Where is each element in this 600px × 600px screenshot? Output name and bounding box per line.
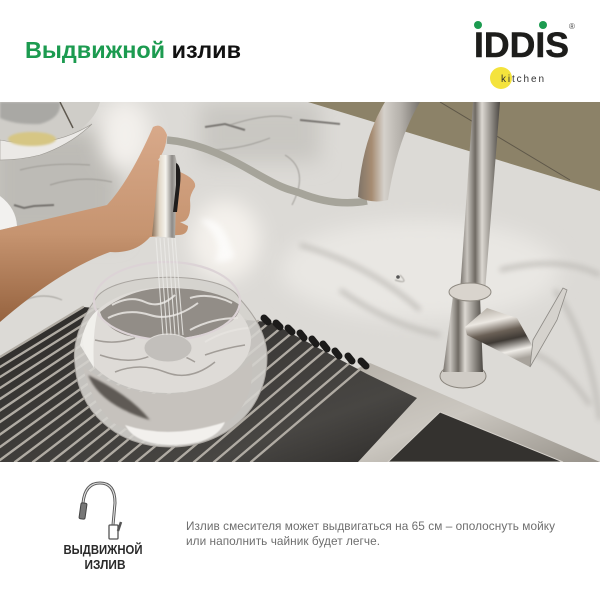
water surface [83,287,251,393]
icon label: ИЗЛИВ [84,558,126,572]
bowl on counter at top left [0,102,100,160]
bowl glass body [74,277,267,447]
logo yellow circle [490,67,512,89]
hose [167,140,367,203]
sink basin left [0,307,417,462]
white object at left edge [0,196,17,230]
water streams [156,238,183,335]
drying rack bars [0,307,365,462]
marble countertop [0,102,600,462]
water ripples [108,294,236,331]
faucet lever [530,288,567,367]
description text [186,519,555,548]
bowl rim [94,262,240,340]
water dark band [88,375,150,420]
icon label [64,542,143,572]
glass bowl with water [74,262,267,447]
description text: или наполнить чайник будет легче. [186,534,380,548]
logo registered mark: ® [569,22,575,31]
logo: IDDIS kitchen [474,21,575,89]
faucet foot [440,369,486,388]
spray head black button [173,163,180,212]
photo: kitchen sink with pull-out faucet [0,99,600,462]
steel deck [330,363,600,462]
faucet base [443,296,483,372]
water lower volume [84,364,252,432]
rack black end caps [264,318,366,366]
faucet riser [460,102,500,292]
logo wordmark: IDDIS [474,26,569,65]
faucet spout [358,102,420,201]
description text: Излив смесителя может выдвигаться на 65 см – ополоснуть мойку [186,519,555,533]
water splash [144,334,192,362]
water surface back [100,288,240,339]
water bright bottom [125,422,225,445]
logo green dots [474,21,547,29]
icon label: ВЫДВИЖНОЙ [64,542,143,557]
spray head [152,155,177,238]
back wall [308,102,600,191]
logo kitchen: kitchen [501,74,544,85]
icon: pull-out faucet [79,483,121,539]
faucet handle body [465,308,533,367]
marble shading and veins [0,99,600,420]
wall dark diagonal line [440,102,570,180]
faucet collar [449,283,491,301]
bowl highlight [80,310,98,368]
sink basin right [388,412,563,462]
arm and hand [0,126,195,322]
title: Выдвижной излив [25,37,241,63]
